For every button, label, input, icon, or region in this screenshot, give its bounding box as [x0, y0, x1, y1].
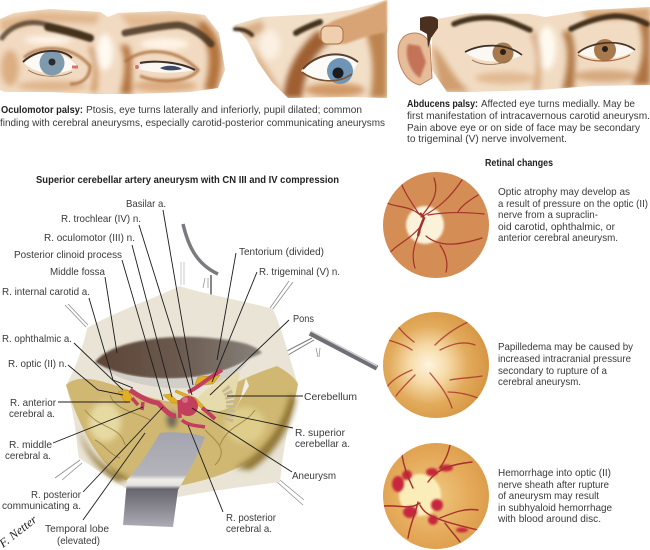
retinal image: papilledema — [383, 312, 489, 418]
text: optic atrophy: Optic atrophy may develop as — [498, 186, 630, 198]
caption: abducens palsy: Pain above eye or on side of face may be secondary — [407, 122, 641, 134]
text: hemorrhage: of aneurysm may result — [498, 490, 599, 502]
eyebrows — [2, 23, 211, 44]
text: optic atrophy: anterior cerebral aneurysm. — [498, 232, 618, 244]
retinal image: hemorrhage — [383, 443, 489, 549]
anatomical labels: Cerebellum — [304, 391, 357, 403]
heading: retinal changes: Retinal changes — [485, 157, 553, 169]
text: optic atrophy — [498, 186, 648, 244]
eye turned laterally and inferiorly — [301, 54, 358, 84]
text: papilledema: Papilledema may be caused by — [498, 341, 634, 353]
text: papilledema: increased intracranial pressure — [498, 353, 631, 365]
surgical diagram — [0, 198, 377, 550]
caption: oculomotor palsy: Oculomotor palsy: — [1, 104, 83, 116]
anatomical labels: Basilar a. — [126, 198, 166, 210]
text: hemorrhage: with blood around disc. — [497, 513, 601, 525]
text: hemorrhage: in subhyaloid hemorrhage — [498, 502, 612, 514]
retractor — [123, 432, 205, 527]
anatomical labels: Aneurysm — [292, 470, 336, 482]
right eye with ptosis — [133, 62, 195, 73]
text: papilledema: secondary to rupture of a — [498, 365, 607, 377]
left eye — [23, 50, 78, 76]
retinal image: optic atrophy — [383, 172, 489, 278]
anatomical labels: cerebral a. — [5, 450, 51, 462]
dura — [66, 286, 297, 497]
caption: abducens palsy — [407, 98, 650, 145]
tan lobes of brain — [66, 366, 298, 486]
anatomical labels: R. posterior — [31, 489, 81, 501]
caption: oculomotor palsy: Ptosis, eye turns laterally and inferiorly, pupil dilated; common — [86, 104, 362, 116]
leader lines — [53, 210, 303, 520]
anatomical labels: communicating a. — [2, 500, 81, 512]
stitches and instruments — [55, 224, 377, 505]
anatomical labels: R. posterior — [226, 512, 276, 524]
eye turned medially — [465, 42, 522, 64]
anatomical labels: Posterior clinoid process — [14, 249, 122, 261]
text: hemorrhage: Hemorrhage into optic (II) — [498, 467, 611, 479]
anatomical labels: cerebral a. — [226, 523, 272, 535]
anatomical labels: cerebral a. — [9, 408, 55, 420]
anatomical labels — [2, 198, 357, 547]
caption: oculomotor palsy — [0, 104, 385, 129]
anatomical labels: cerebellar a. — [295, 438, 350, 450]
caption: abducens palsy: Abducens palsy: — [407, 98, 478, 110]
caption: abducens palsy: Affected eye turns medially. May be — [481, 98, 635, 110]
eyebrow fragments — [235, 22, 320, 35]
ear and hair — [398, 16, 438, 85]
anatomical labels: R. optic (II) n. — [8, 358, 67, 370]
text: hemorrhage — [497, 467, 612, 525]
anatomical labels: R. internal carotid a. — [2, 286, 90, 298]
illustration: oculomotor palsy, both eyes — [0, 0, 390, 100]
text: hemorrhage: nerve sheath after rupture — [498, 479, 609, 491]
grey rim — [96, 358, 250, 388]
heading: superior cerebellar artery aneurysm: Superior cerebellar artery aneurysm with CN III and IV compression — [36, 174, 339, 186]
text: papilledema: cerebral aneurysm. — [498, 376, 581, 388]
anatomical labels: R. trochlear (IV) n. — [61, 213, 141, 225]
anatomical labels: R. ophthalmic a. — [2, 333, 72, 345]
text: papilledema — [498, 341, 634, 388]
anatomical labels: Tentorium (divided) — [239, 246, 324, 258]
illustration: abducens palsy — [398, 7, 650, 92]
anatomical labels: Pons — [293, 313, 314, 325]
anatomical labels: R. trigeminal (V) n. — [259, 266, 340, 278]
text: optic atrophy: nerve from a supraclin- — [498, 209, 598, 221]
dark cavity under tentorium — [95, 337, 262, 379]
text: optic atrophy: oid carotid, ophthalmic, or — [498, 221, 615, 233]
caption: abducens palsy: to trigeminal (V) nerve involvement. — [407, 133, 567, 145]
anatomical labels: Temporal lobe — [45, 523, 109, 535]
anatomical labels: R. middle — [9, 439, 52, 451]
unaffected eye — [578, 39, 635, 61]
anatomical labels: R. oculomotor (III) n. — [44, 232, 135, 244]
anatomical labels: R. anterior — [10, 397, 56, 409]
anatomical labels: (elevated) — [57, 535, 100, 547]
eyebrows — [454, 16, 647, 30]
brainstem and pons — [190, 372, 249, 422]
anatomical labels: Middle fossa — [50, 266, 105, 278]
caption: oculomotor palsy: finding with cerebral aneurysms, especially carotid-posterior communicating aneurysms — [0, 117, 385, 129]
examining finger — [319, 0, 387, 44]
anatomical labels: R. superior — [295, 427, 345, 439]
arteries and aneurysm — [130, 370, 222, 427]
yellow nerves — [118, 375, 220, 419]
